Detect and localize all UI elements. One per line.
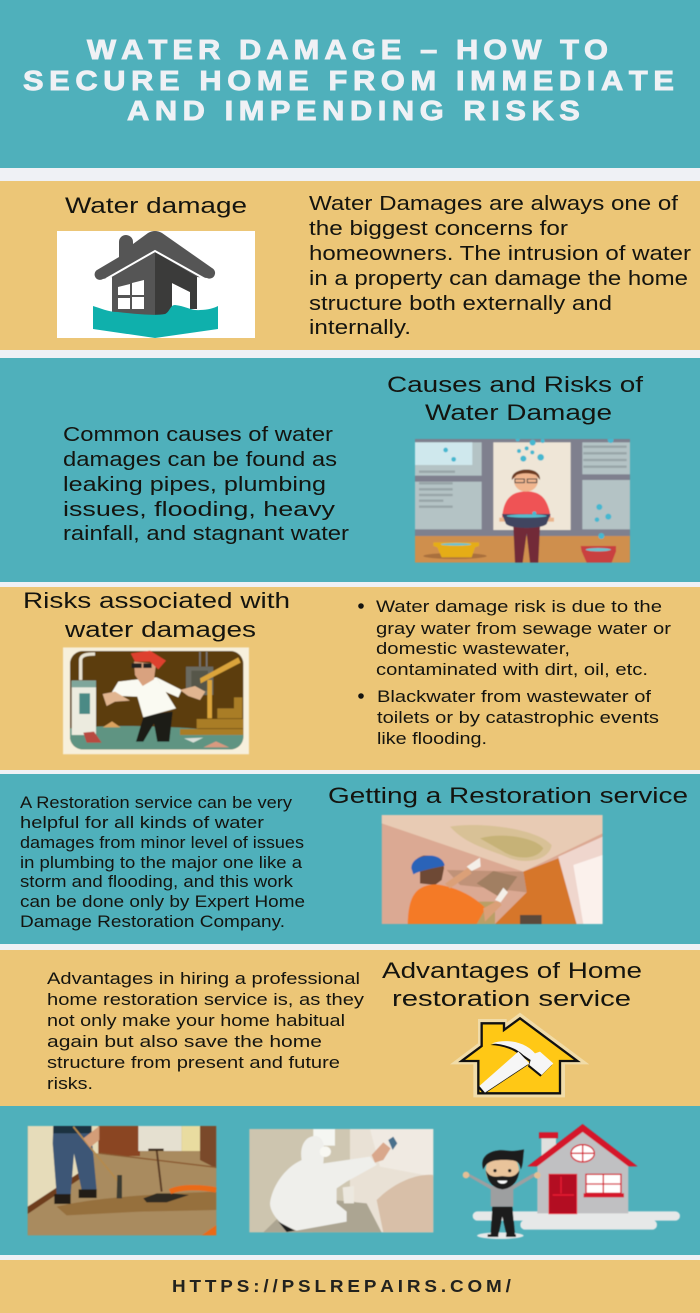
text: common causes: damages can be found as: [63, 449, 337, 471]
text: advantages description: [47, 969, 365, 1093]
text: water damage description: Water Damages are always one of: [309, 193, 679, 215]
bullet: blackwater: like flooding.: [377, 729, 487, 748]
heading: causes and risks: Causes and Risks of: [387, 372, 644, 397]
list: water damage risks: [358, 597, 671, 748]
heading: getting a restoration service: Getting a Restoration service: [328, 783, 688, 808]
bullet: blackwater: [358, 687, 659, 748]
panel: water damage: [0, 181, 700, 350]
title: WATER DAMAGE – HOW TO: [87, 35, 613, 66]
text: advantages description: Advantages in hiring a professional: [47, 969, 360, 988]
heading: water damage: Water damage: [65, 193, 247, 218]
text: water damage description: in a property can damage the home: [309, 268, 688, 290]
text: common causes: leaking pipes, plumbing: [63, 474, 326, 496]
text: water damage description: the biggest concerns for: [309, 218, 568, 240]
text: restoration service description: helpful for all kinds of water: [20, 814, 265, 832]
text: restoration service description: can be done only by Expert Home: [20, 893, 305, 911]
heading: advantages: Advantages of Home: [382, 958, 642, 983]
text: restoration service description: in plumbing to the major one like a: [20, 854, 303, 872]
panel: website footer: [0, 1260, 700, 1313]
text: advantages description: risks.: [47, 1074, 93, 1093]
text: restoration service description: damages from minor level of issues: [20, 834, 304, 852]
text: water damage description: [309, 193, 691, 339]
text: common causes: Common causes of water: [63, 424, 333, 446]
heading: risks associated: Risks associated with: [23, 588, 290, 613]
illustration: man in flooded basement: [63, 647, 249, 754]
title: [23, 35, 680, 127]
text: advantages description: structure from present and future: [47, 1053, 340, 1072]
panel: risks associated: [0, 587, 700, 770]
panel: causes and risks: [0, 358, 700, 582]
photo: worker inspecting ceiling: [382, 815, 603, 924]
heading: risks associated: water damages: [64, 617, 256, 642]
text: restoration service description: A Restoration service can be very: [20, 794, 293, 812]
title: SECURE HOME FROM IMMEDIATE: [23, 66, 680, 97]
illustration: bearded man and red house: [463, 1124, 680, 1239]
text: water damage description: structure both externally and: [309, 293, 612, 315]
photo: water extraction from carpet: [28, 1126, 216, 1235]
panel: photo strip: [0, 1106, 700, 1255]
text: restoration service description: Damage Restoration Company.: [20, 913, 285, 931]
bullet: gray water: Water damage risk is due to the: [376, 597, 662, 616]
text: common causes: rainfall, and stagnant water: [63, 523, 349, 545]
text: restoration service description: storm and flooding, and this work: [20, 873, 294, 891]
icon: flooded house: [57, 231, 255, 338]
panel: title header: [0, 0, 700, 168]
heading: causes and risks: Water Damage: [425, 400, 612, 425]
heading: risks associated: [23, 588, 290, 642]
panel: restoration service: [0, 774, 700, 944]
bullet: gray water: domestic wastewater,: [376, 639, 570, 658]
text: advantages description: home restoration service is, as they: [47, 990, 365, 1009]
panel: advantages: [0, 950, 700, 1106]
text: common causes: issues, flooding, heavy: [63, 499, 335, 521]
text: water damage description: internally.: [309, 317, 411, 339]
bullet: blackwater: toilets or by catastrophic events: [377, 708, 659, 727]
title: AND IMPENDING RISKS: [127, 96, 585, 127]
text: advantages description: again but also save the home: [47, 1032, 322, 1051]
photo: worker in protective suit cleaning mold: [249, 1129, 433, 1232]
icon: house with hammer: [450, 1013, 589, 1097]
heading: causes and risks: [387, 372, 644, 425]
text: water damage description: homeowners. The intrusion of water: [309, 243, 691, 265]
bullet: gray water: contaminated with dirt, oil, etc.: [376, 660, 648, 679]
bullet: blackwater: Blackwater from wastewater of: [377, 687, 651, 706]
text: advantages description: not only make your home habitual: [47, 1011, 345, 1030]
heading: advantages: restoration service: [392, 986, 631, 1011]
bullet: gray water: gray water from sewage water or: [376, 619, 671, 638]
text: restoration service description: [20, 794, 305, 931]
bullet: gray water: [358, 597, 671, 679]
heading: advantages: [382, 958, 642, 1011]
illustration: man catching leaking water: [415, 437, 630, 563]
text: common causes: [63, 424, 349, 545]
text: website url: HTTPS://PSLREPAIRS.COM/: [172, 1275, 515, 1296]
